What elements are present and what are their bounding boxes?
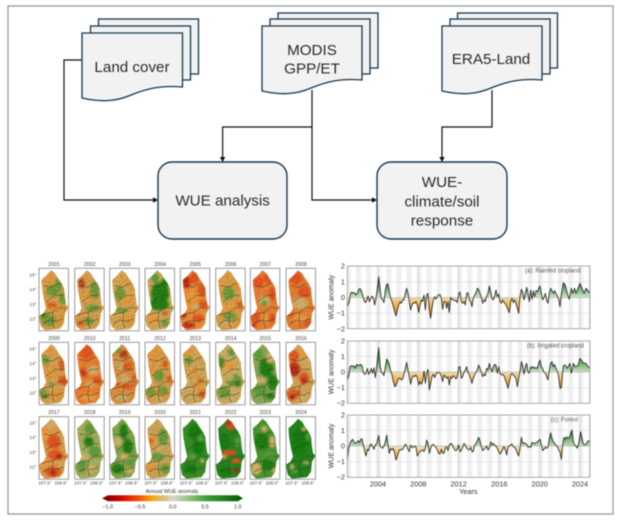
line chart (c): forest: WUE anomaly xyxy=(328,423,335,468)
flowchart connector: MODIS to WUE analysis and response xyxy=(220,90,377,203)
map latitude and longitude tick labels: 13° xyxy=(30,302,37,307)
colour bar legend: annual WUE anomaly xyxy=(102,489,243,510)
map latitude and longitude tick labels: 13° xyxy=(30,450,37,455)
line chart (a): rainfed cropland xyxy=(328,262,590,333)
map 2008 xyxy=(286,262,316,331)
line chart (c): forest: 1 xyxy=(341,426,345,435)
map 2010 xyxy=(75,336,105,405)
map latitude and longitude tick labels: 108.6° xyxy=(231,480,245,486)
flowchart connector: land cover to WUE analysis xyxy=(64,60,158,203)
map latitude and longitude tick labels: 12° xyxy=(30,390,37,396)
colour bar legend: annual WUE anomaly: −0.5 xyxy=(135,504,145,510)
map 2002 xyxy=(75,262,105,331)
line chart (b): irrigated cropland: 1 xyxy=(341,352,345,361)
map latitude and longitude tick labels: 14° xyxy=(30,435,37,440)
map 2023 xyxy=(250,410,280,480)
map 2005: 2005 xyxy=(190,262,201,268)
map 2021: 2021 xyxy=(190,410,201,416)
map latitude and longitude tick labels: 108.6° xyxy=(125,480,139,486)
line chart (a): rainfed cropland: WUE anomaly xyxy=(328,275,335,320)
line chart (b): irrigated cropland xyxy=(328,336,590,408)
map 2002: 2002 xyxy=(84,262,96,268)
map latitude and longitude tick labels: 14° xyxy=(30,361,37,366)
map 2009 xyxy=(39,336,69,405)
colour bar legend: annual WUE anomaly: 1.0 xyxy=(234,504,241,510)
process box: WUE-climate/soil response: WUE- xyxy=(422,174,462,191)
map latitude and longitude tick labels: 15° xyxy=(30,420,37,426)
map 2024 xyxy=(286,410,316,480)
map 2018: 2018 xyxy=(84,410,96,416)
line chart (b): irrigated cropland: −2 xyxy=(337,399,345,408)
map latitude and longitude tick labels: 108.6° xyxy=(90,480,104,486)
map 2012: 2012 xyxy=(154,336,166,342)
map 2012 xyxy=(145,336,175,405)
map latitude and longitude tick labels: 107.5° xyxy=(144,480,158,486)
line chart (a): rainfed cropland: 2 xyxy=(341,262,345,271)
process box: WUE-climate/soil response xyxy=(377,162,507,239)
line chart (c): forest: 2004 xyxy=(370,479,386,488)
map latitude and longitude tick labels: 108.6° xyxy=(196,480,209,486)
map 2009: 2009 xyxy=(48,336,60,342)
map latitude and longitude tick labels: 15° xyxy=(30,272,37,278)
line chart (a): rainfed cropland: 0 xyxy=(341,293,345,302)
line chart (a): rainfed cropland: −1 xyxy=(337,309,345,318)
map latitude and longitude tick labels: 108.6° xyxy=(266,480,279,486)
map 2016: 2016 xyxy=(295,336,307,342)
map 2022 xyxy=(216,410,246,480)
line chart (b): irrigated cropland: −1 xyxy=(337,383,345,392)
line chart (a): rainfed cropland: 1 xyxy=(341,277,345,286)
line chart (b): irrigated cropland: (b): Irrigated cropland xyxy=(527,343,584,349)
line chart (a): rainfed cropland: (a): Rainfed cropland xyxy=(525,268,581,274)
process box: WUE analysis: WUE analysis xyxy=(175,192,270,210)
colour bar legend: annual WUE anomaly: 0.5 xyxy=(201,504,209,510)
map 2008: 2008 xyxy=(295,262,307,268)
flowchart connector: ERA5 to response xyxy=(439,90,492,162)
map latitude and longitude tick labels: 107.5° xyxy=(285,480,299,486)
map 2018 xyxy=(75,410,105,480)
map 2003 xyxy=(110,262,140,331)
map 2015 xyxy=(250,336,280,405)
map 2005 xyxy=(180,262,210,331)
colour bar legend: annual WUE anomaly: 0.0 xyxy=(169,504,176,510)
map 2001: 2001 xyxy=(48,262,60,268)
map latitude and longitude tick labels: 13° xyxy=(30,376,37,381)
line chart (a): rainfed cropland: −2 xyxy=(337,324,345,333)
map latitude and longitude tick labels: 107.5° xyxy=(180,480,193,486)
map 2015: 2015 xyxy=(260,336,271,342)
map latitude and longitude tick labels: 108.6° xyxy=(160,480,174,486)
map latitude and longitude tick labels xyxy=(30,272,315,486)
map 2010: 2010 xyxy=(84,336,96,342)
map 2011 xyxy=(110,336,140,405)
map latitude and longitude tick labels: 107.5° xyxy=(215,480,229,486)
map 2022: 2022 xyxy=(225,410,237,416)
line chart (c): forest: 2012 xyxy=(451,479,467,488)
process box: WUE analysis xyxy=(158,162,287,239)
line chart (c): forest: 2024 xyxy=(572,479,588,488)
map 2020: 2020 xyxy=(154,410,166,416)
map latitude and longitude tick labels: 15° xyxy=(30,346,37,352)
map 2019 xyxy=(110,410,140,480)
line chart (c): forest: 2008 xyxy=(410,479,426,488)
line chart (c): forest: (c): Forest xyxy=(551,418,578,424)
map 2006: 2006 xyxy=(225,262,237,268)
map latitude and longitude tick labels: 14° xyxy=(30,287,37,292)
document stack: ERA5-Land xyxy=(442,13,558,94)
document stack: ERA5-Land: ERA5-Land xyxy=(452,51,530,68)
map panel grid: annual WUE anomaly 2001-2024 xyxy=(39,262,316,480)
map 2011: 2011 xyxy=(119,336,130,342)
map 2013 xyxy=(180,336,210,405)
map 2017: 2017 xyxy=(48,410,60,416)
map 2021 xyxy=(180,410,210,480)
document stack: Land cover: Land cover xyxy=(94,59,170,76)
line chart (b): irrigated cropland: 2 xyxy=(341,336,345,345)
map latitude and longitude tick labels: 12° xyxy=(30,316,37,322)
map latitude and longitude tick labels: 107.5° xyxy=(109,480,123,486)
map 2007: 2007 xyxy=(260,262,271,268)
colour bar legend: annual WUE anomaly: −1.0 xyxy=(102,504,113,510)
map latitude and longitude tick labels: 108.6° xyxy=(301,480,315,486)
map 2020 xyxy=(145,410,175,480)
map 2013: 2013 xyxy=(190,336,201,342)
map 2016 xyxy=(286,336,316,405)
map latitude and longitude tick labels: 107.5° xyxy=(74,480,88,486)
map latitude and longitude tick labels: 108.6° xyxy=(54,480,68,486)
line chart (c): forest: 2 xyxy=(341,410,345,419)
map 2006 xyxy=(216,262,246,331)
map 2007 xyxy=(250,262,280,331)
line chart (c): forest: 0 xyxy=(341,441,345,450)
colour bar legend: annual WUE anomaly: Annual WUE anomaly xyxy=(146,489,199,495)
line chart (c): forest: 2016 xyxy=(491,479,507,488)
map 2004 xyxy=(145,262,175,331)
line chart (c): forest xyxy=(328,410,590,496)
map 2001 xyxy=(39,262,69,331)
map latitude and longitude tick labels: 107.5° xyxy=(250,480,263,486)
map 2004: 2004 xyxy=(154,262,166,268)
map 2019: 2019 xyxy=(119,410,131,416)
map 2003: 2003 xyxy=(119,262,131,268)
process box: WUE-climate/soil response: climate/soil xyxy=(404,194,480,210)
map 2023: 2023 xyxy=(260,410,271,416)
line chart (c): forest: 2020 xyxy=(532,479,548,488)
map 2014 xyxy=(216,336,246,405)
map 2014: 2014 xyxy=(225,336,237,342)
document stack: MODIS GPP/ET xyxy=(262,13,378,94)
line chart (b): irrigated cropland: WUE anomaly xyxy=(328,349,335,394)
document stack: MODIS GPP/ET: GPP/ET xyxy=(284,60,340,78)
line chart (c): forest: −1 xyxy=(337,457,345,466)
process box: WUE-climate/soil response: response xyxy=(411,212,473,230)
line chart (c): forest: −2 xyxy=(337,473,345,482)
document stack: Land cover xyxy=(82,19,198,101)
map 2024: 2024 xyxy=(295,410,307,416)
map 2017 xyxy=(39,410,69,480)
document stack: MODIS GPP/ET: MODIS xyxy=(287,42,337,59)
map latitude and longitude tick labels: 12° xyxy=(30,464,37,470)
line chart (c): forest: Years xyxy=(459,487,478,496)
map latitude and longitude tick labels: 107.5° xyxy=(38,480,52,486)
line chart (b): irrigated cropland: 0 xyxy=(341,367,345,376)
